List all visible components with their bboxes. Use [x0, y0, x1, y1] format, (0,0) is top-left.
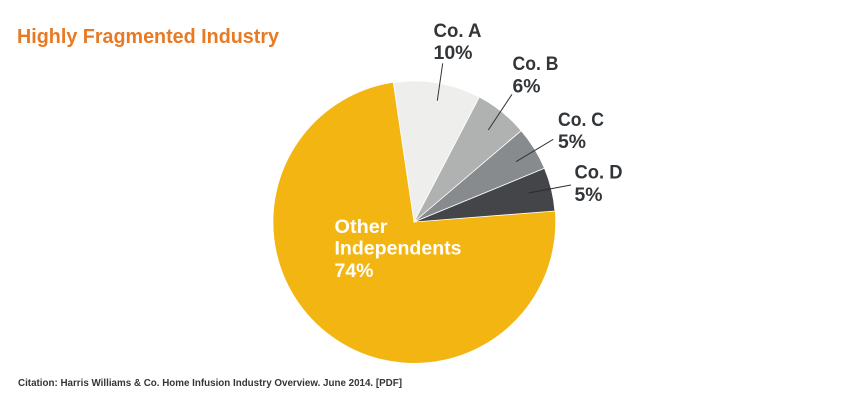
label: Co. D 5% [574, 162, 622, 206]
label: Other Independents 74% [334, 217, 462, 282]
pie chart [273, 81, 555, 363]
leader line: Co. B [488, 94, 512, 130]
label: Co. D 5%: Co. D [574, 162, 622, 184]
label: Co. C 5%: Co. C [558, 110, 604, 131]
wedge: other independents 74% [273, 83, 555, 363]
label: Co. B 6% [512, 54, 558, 98]
label: Co. B 6%: Co. B [512, 54, 558, 75]
label: Co. A 10% [434, 21, 482, 64]
wedge: Co. C 5% [414, 131, 544, 222]
leader line: Co. A [437, 63, 443, 101]
citation: Citation: Harris Williams & Co. Home Infusion Industry Overview. June 2014. [PDF] [18, 378, 402, 389]
wedge: Co. D 5% [414, 168, 555, 222]
label: Other Independents 74%: Other [334, 217, 388, 238]
leader line: Co. C [516, 139, 553, 162]
title: Highly Fragmented Industry [17, 26, 280, 48]
label: Co. C 5%: 5% [558, 132, 586, 153]
label: Co. A 10%: 10% [434, 43, 473, 64]
label: Co. A 10%: Co. A [434, 21, 482, 42]
label: Co. B 6%: 6% [512, 76, 541, 98]
label: Other Independents 74%: Independents [334, 238, 462, 260]
label: Co. C 5% [558, 110, 604, 153]
label: Co. D 5%: 5% [574, 185, 603, 206]
label: Other Independents 74%: 74% [334, 261, 374, 282]
wedge: Co. B 6% [414, 97, 521, 222]
wedge: Co. A 10% [393, 81, 479, 222]
leader line: Co. D [528, 185, 571, 193]
